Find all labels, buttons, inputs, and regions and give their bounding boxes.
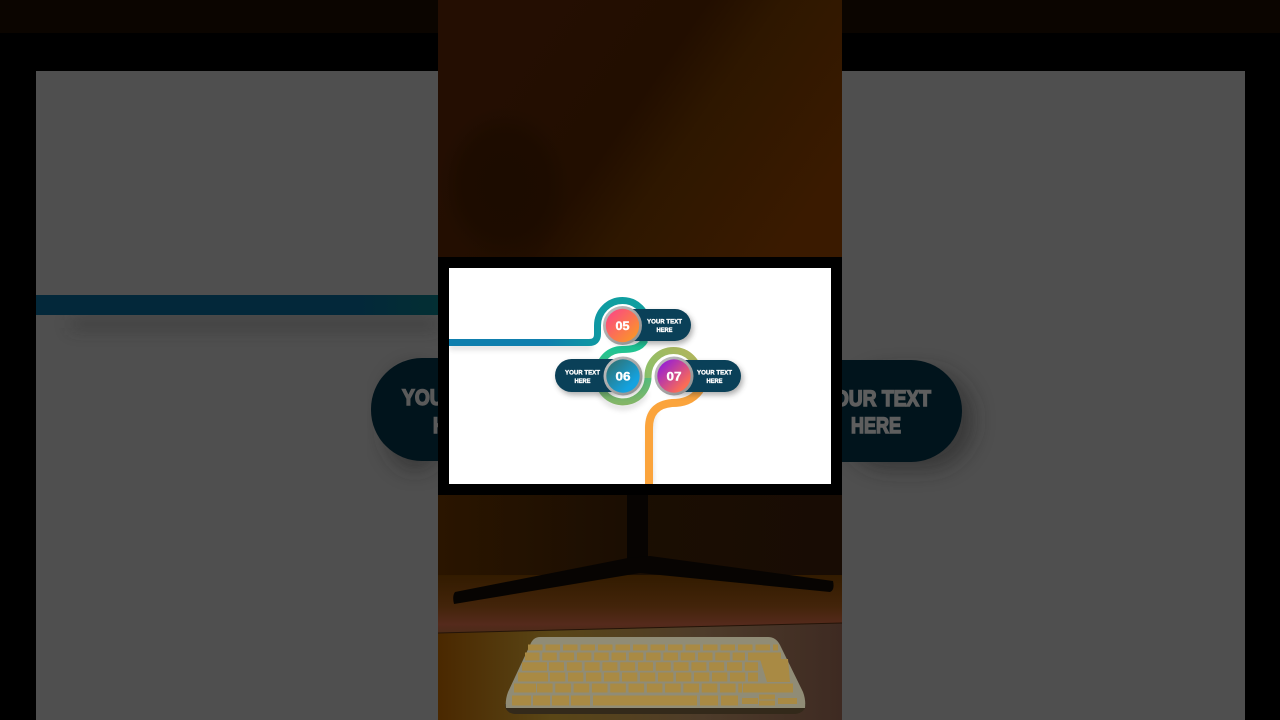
backdrop ribbon <box>36 295 438 315</box>
step 07 <box>654 356 743 396</box>
ribbon shadows <box>449 347 655 484</box>
backdrop right pill <box>780 360 962 462</box>
step 05: HERE <box>656 327 673 334</box>
diagram: ribbon path with numbered steps <box>449 300 743 484</box>
step 05: YOUR TEXT <box>647 318 682 326</box>
step 07: HERE <box>706 378 723 385</box>
monitor bezel <box>438 257 842 495</box>
step 07: YOUR TEXT <box>697 370 732 376</box>
panel: room photo <box>438 0 842 720</box>
ribbon: green S-curve around 06 <box>598 340 648 402</box>
step 05: 05 <box>616 319 630 333</box>
monitor stand <box>453 494 834 604</box>
backdrop left pill: YOUR TEXT <box>402 385 512 410</box>
keyboard <box>505 637 806 714</box>
ribbon: orange tail <box>649 390 700 484</box>
screen: white slide <box>449 268 831 484</box>
backdrop right pill: HERE <box>851 413 901 438</box>
ribbon: blue-teal <box>449 300 648 342</box>
backdrop left pill: HERE <box>433 413 483 438</box>
step 05 <box>603 306 693 345</box>
step 06: YOUR TEXT <box>565 370 600 376</box>
step 06 <box>555 356 642 396</box>
step 07: 07 <box>666 370 682 384</box>
key caps <box>512 648 797 703</box>
step 06: 06 <box>616 370 631 384</box>
step 06: HERE <box>574 378 591 385</box>
backdrop right pill: YOUR TEXT <box>821 386 931 411</box>
ribbon: lime arc over 07 <box>648 350 699 378</box>
backdrop left pill <box>371 358 531 461</box>
